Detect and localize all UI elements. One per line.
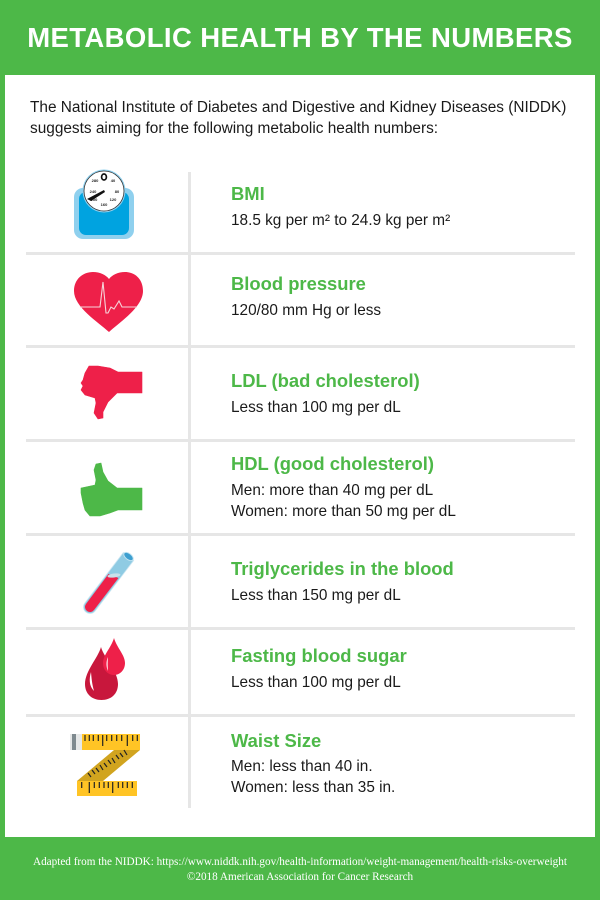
row: Fasting blood sugar (231, 645, 407, 691)
text: LDL value: Less than 100 mg per dL (231, 399, 401, 416)
row: LDL (231, 370, 420, 416)
text: Blood pressure value: 120/80 mm Hg or less (231, 302, 381, 319)
icon: weighing scale: 240 (90, 189, 97, 194)
icon: weighing scale: 120 (110, 197, 117, 202)
row: Blood pressure (231, 273, 381, 319)
text: Triglycerides value: Less than 150 mg per dL (231, 587, 401, 604)
heading: Fasting blood sugar: Fasting blood sugar (231, 645, 407, 666)
icon: measuring tape (70, 734, 140, 796)
row: BMI (231, 183, 450, 229)
text: HDL values: Men: more than 40 mg per dL (231, 482, 433, 499)
icon: heart with pulse (74, 272, 143, 332)
text: HDL values: Women: more than 50 mg per dL (231, 502, 456, 520)
footer credit (33, 856, 567, 883)
icon: weighing scale: 280 (92, 178, 99, 183)
title: METABOLIC HEALTH BY THE NUMBERS (27, 22, 573, 53)
intro text: The National Institute of Diabetes and Digestive and Kidney Diseases (NIDDK) (30, 99, 566, 116)
row: HDL (231, 453, 456, 520)
footer credit: ©2018 American Association for Cancer Research (187, 871, 413, 883)
icon: test tube (83, 551, 135, 614)
text: Waist size values: Men: less than 40 in. (231, 758, 373, 775)
icon: weighing scale: 40 (111, 178, 116, 183)
footer credit: Adapted from the NIDDK: https://www.niddk.nih.gov/health-information/weight-management/health-risks-overweight (33, 856, 567, 868)
intro text (30, 99, 566, 137)
icon: thumbs down (81, 366, 142, 419)
text: HDL values (231, 482, 456, 520)
text: Waist size values (231, 758, 395, 796)
icon: weighing scale (74, 170, 134, 239)
icon: weighing scale: 80 (115, 189, 120, 194)
heading: Triglycerides: Triglycerides in the blood (231, 558, 454, 579)
heading: Blood pressure: Blood pressure (231, 273, 366, 294)
text: BMI value: 18.5 kg per m² to 24.9 kg per m² (231, 212, 450, 229)
text: Fasting blood sugar value: Less than 100 mg per dL (231, 674, 401, 691)
icon: blood drops (85, 638, 125, 700)
heading: BMI: BMI (231, 183, 265, 204)
row: Waist size (231, 730, 395, 796)
heading: LDL: LDL (bad cholesterol) (231, 370, 420, 391)
intro text: suggests aiming for the following metabolic health numbers: (30, 120, 438, 137)
heading: HDL: HDL (good cholesterol) (231, 453, 434, 474)
row: Triglycerides (231, 558, 454, 604)
icon: weighing scale: 160 (101, 202, 108, 207)
icon: thumbs up (81, 463, 142, 516)
text: Waist size values: Women: less than 35 in. (231, 778, 395, 796)
heading: Waist size: Waist Size (231, 730, 321, 751)
icon: weighing scale: 200 (91, 197, 98, 202)
